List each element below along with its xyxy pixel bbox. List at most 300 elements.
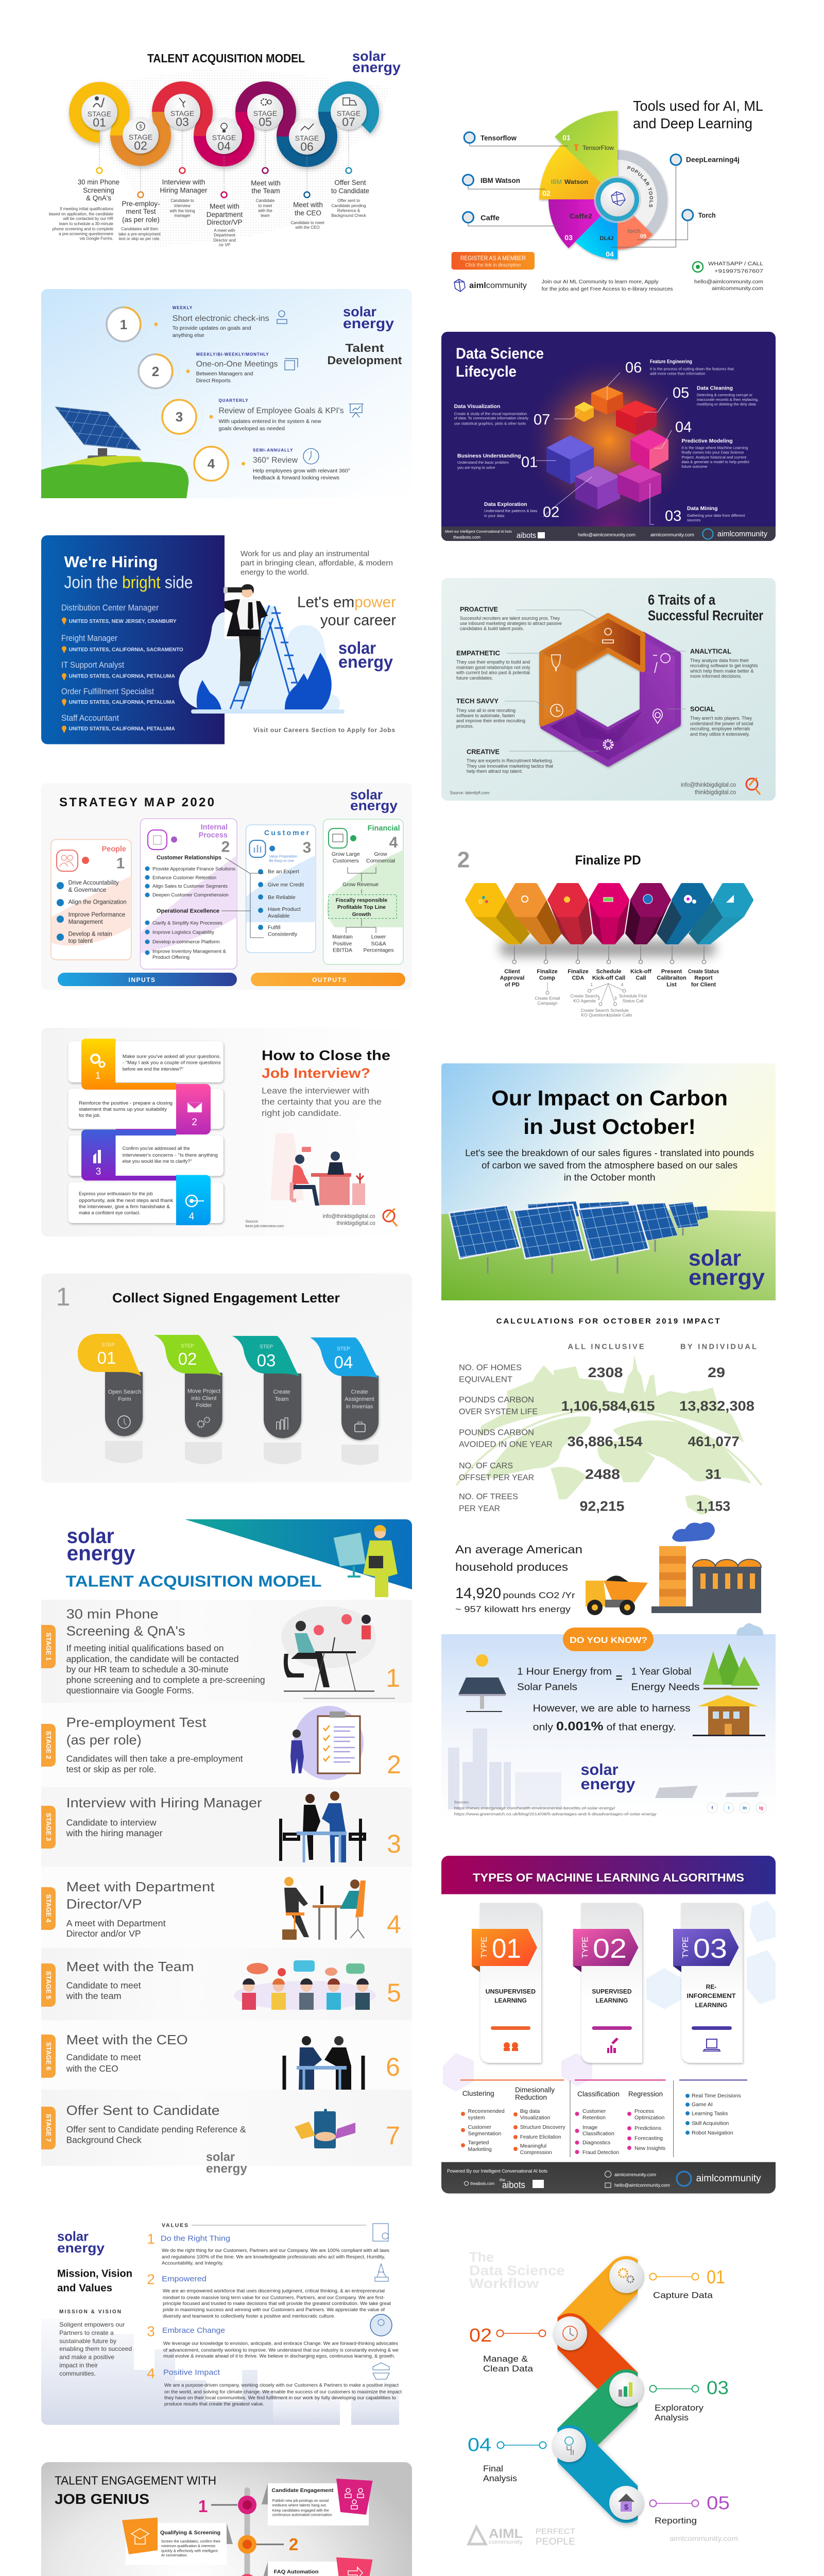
row 5 text: Meet with the Team bbox=[66, 1959, 194, 1974]
value 3: We leverage our knowledge to envision, anticipate, and embrace Change. We are forward-thinking advocates bbox=[163, 2341, 398, 2347]
card: internal process: Clarify & Simplify Key Processes bbox=[152, 921, 222, 926]
step 4 text: SEMI-ANNUALLY bbox=[253, 448, 293, 452]
trait: empathetic: They use their empathy to build and bbox=[456, 659, 530, 665]
faint globe with skyline bbox=[456, 1355, 762, 1515]
intro text: energy to the world. bbox=[241, 568, 309, 577]
sources: Sources: bbox=[454, 1800, 469, 1805]
stage tab 7 bbox=[41, 2107, 56, 2149]
step 3 text: With updates entered in the system & new bbox=[218, 418, 321, 425]
row 1 text: by our HR team to schedule a 30-minute bbox=[66, 1664, 229, 1674]
value 4: on the world, and solving for climate change. We enable the success of our customers to maximize the impact bbox=[164, 2389, 402, 2395]
card: people: Management bbox=[68, 919, 104, 925]
stage 05 badge bbox=[247, 94, 283, 130]
card: customer: Be Easy to Use bbox=[269, 859, 294, 863]
column headings: BY INDIVIDUAL bbox=[680, 1343, 757, 1351]
stage tab 6 bbox=[41, 2035, 56, 2078]
type 02 card: 02 bbox=[593, 1934, 627, 1964]
step 04 text: Predictive Modeling bbox=[682, 438, 733, 444]
step 05 text: Data Cleaning bbox=[697, 385, 733, 392]
column: dimensionality reduction: Feature Elicitation bbox=[520, 2134, 561, 2140]
trait: social: They aren't solo players. They bbox=[690, 716, 752, 721]
step 04: Assignment bbox=[345, 1396, 374, 1402]
row 4 text: Meet with Department bbox=[66, 1879, 215, 1894]
prism labels: Call bbox=[636, 975, 646, 981]
hex prisms bbox=[465, 900, 753, 944]
panel: 6 traits of a successful recruiter bbox=[441, 578, 776, 801]
card: candidate engagement: Keep candidates engaged with the bbox=[272, 2508, 329, 2513]
step 2 ring: 2 bbox=[152, 364, 159, 379]
job: order fulfillment specialist bbox=[61, 687, 175, 706]
stage labels: Pre-employ- bbox=[122, 200, 160, 208]
step texts: statement that sums up your suitability bbox=[79, 1107, 167, 1112]
prism labels: Kick-off Call bbox=[592, 975, 625, 981]
footer strip: hello@aimlcommunity.com bbox=[578, 532, 636, 538]
type 03 card: INFORCEMENT bbox=[687, 1992, 736, 1999]
step number: 1 bbox=[56, 1282, 70, 1311]
card: customer: Give me Credit bbox=[268, 882, 304, 888]
stage 02 badge: $ bbox=[139, 124, 142, 130]
tools title bbox=[633, 98, 763, 131]
prism labels: Create Status bbox=[688, 969, 719, 975]
talent development heading: Talent bbox=[345, 342, 384, 354]
inputs bar bbox=[58, 973, 237, 986]
job genius heading: JOB GENIUS bbox=[55, 2491, 149, 2507]
stage labels: ment Test bbox=[126, 208, 156, 215]
trait: creative: They are experts in Recruitment Marketing. bbox=[467, 758, 553, 764]
card: customer: Fulfill bbox=[268, 925, 281, 931]
dump truck bbox=[586, 1575, 648, 1615]
column: classification: Customer bbox=[582, 2108, 606, 2114]
stage labels: Meet with bbox=[251, 179, 281, 187]
stage labels: Hiring Manager bbox=[160, 187, 208, 194]
logo: solar energy: solar bbox=[343, 304, 376, 319]
node 2 bbox=[238, 2535, 298, 2554]
value 3: of advancement, constantly working to improve. We understand that our industry is constantly evolving & we bbox=[163, 2347, 399, 2353]
column: regression bbox=[627, 2090, 665, 2151]
prism labels: Approval bbox=[500, 975, 524, 981]
hub bbox=[594, 176, 641, 223]
wheel labels: POPULAR TOOLS USED bbox=[627, 166, 653, 207]
column: classification: Classification bbox=[577, 2090, 620, 2098]
card: people: 1 bbox=[116, 855, 125, 872]
illustration: CEO handshake bbox=[284, 2036, 363, 2090]
job: IT support analyst: UNITED STATES, CALIFORNIA, PETALUMA bbox=[69, 674, 175, 680]
faint workflow title bbox=[469, 2249, 565, 2291]
job: distribution center manager bbox=[61, 603, 177, 625]
sub-task tree: 1 bbox=[590, 982, 593, 987]
talent development heading: Development bbox=[328, 354, 402, 367]
label 02: Clean Data bbox=[483, 2364, 534, 2374]
mission and vision text: Partners to create a bbox=[59, 2329, 114, 2336]
prism labels: List bbox=[666, 981, 677, 988]
column: dimensionality reduction: Compression bbox=[520, 2149, 552, 2156]
logo: solar energy bbox=[581, 1760, 636, 1793]
sub-task tree: Create Search bbox=[571, 993, 599, 998]
mission and vision text bbox=[59, 2309, 132, 2377]
stage details: Offer sent to bbox=[337, 198, 360, 203]
prism labels: Schedule bbox=[596, 969, 621, 975]
column: reinforcement uses: Game AI bbox=[692, 2102, 713, 2108]
stage 04 badge: STAGE bbox=[212, 133, 236, 142]
row labels: EQUIVALENT bbox=[459, 1375, 513, 1384]
careers note: Visit our Careers Section to Apply for Jobs bbox=[253, 726, 395, 734]
trait: analytical: ANALYTICAL bbox=[690, 647, 731, 655]
trait: proactive: use inbound marketing strategies to attract passive bbox=[460, 621, 562, 626]
values header: VALUES bbox=[162, 2223, 188, 2229]
column headings bbox=[568, 1343, 757, 1351]
logo: solar energy bbox=[689, 1246, 765, 1290]
card: internal process: Enhance Customer Retention bbox=[152, 875, 216, 881]
column: clustering: Recommended bbox=[468, 2108, 505, 2114]
trait: empathetic: future candidates. bbox=[456, 675, 493, 681]
capsule reflections bbox=[105, 1441, 379, 1465]
trait: analytical: recruiting software to get insights bbox=[690, 663, 758, 668]
card: qualifying and screening: minimum qualification & interests bbox=[161, 2544, 215, 2548]
trait: creative: help them attract top talent. bbox=[467, 769, 523, 774]
step 03 text bbox=[687, 505, 745, 522]
row 1 text: application, the candidate will be contacted bbox=[66, 1654, 239, 1664]
panel: calculations for october 2019 impact bbox=[441, 1317, 776, 1818]
contact: hello@aimlcommunity.com bbox=[694, 279, 763, 285]
ribbon step 3 bbox=[81, 1130, 176, 1181]
tool: Torch: Torch bbox=[698, 211, 716, 219]
logo: solar energy: energy bbox=[343, 315, 394, 331]
step 04 text: future outcome bbox=[682, 464, 708, 469]
node 1: 1 bbox=[198, 2497, 208, 2516]
column: reinforcement uses bbox=[685, 2093, 741, 2136]
value 4 bbox=[147, 2363, 402, 2407]
trait: proactive: candidates & build talent pools. bbox=[460, 626, 524, 631]
number 1: 1 bbox=[386, 1664, 400, 1692]
illustration: engineer with panel bbox=[334, 1525, 398, 1597]
energy equation: Energy Needs bbox=[631, 1682, 699, 1693]
row 5 text: with the team bbox=[66, 1991, 122, 2001]
label 01: 01 bbox=[707, 2266, 725, 2287]
row 1 text: phone screening and to complete a pre-screening bbox=[66, 1675, 265, 1685]
column: reinforcement uses: Robot Navigation bbox=[692, 2130, 733, 2136]
row 6 text: Meet with the CEO bbox=[66, 2032, 188, 2047]
mission and vision text: sustainable future by bbox=[59, 2337, 116, 2345]
sources: https://www.greenmatch.co.uk/blog/2014/08/5-advantages-and-5-disadvantages-of-solar-energy bbox=[454, 1812, 657, 1817]
row 6 text: with the CEO bbox=[66, 2063, 118, 2074]
impact values: 1,106,584,615 bbox=[561, 1398, 655, 1414]
ribbon step 3: 3 bbox=[96, 1166, 101, 1177]
card: internal process: Improve Logistics Capability bbox=[152, 929, 214, 936]
sources: https://news.energysage.com/health-environmental-benefits-of-solar-energy/ bbox=[454, 1806, 616, 1810]
contact: +919975767607 bbox=[714, 268, 763, 274]
step texts: before we end the interview?" bbox=[123, 1066, 183, 1072]
panel: talent development bbox=[41, 289, 412, 498]
logo: solar energy bbox=[57, 2229, 105, 2256]
do you know pill: DO YOU KNOW? bbox=[570, 1635, 647, 1645]
type 03 card: LEARNING bbox=[695, 2002, 727, 2009]
row 6 text: Candidate to meet bbox=[66, 2052, 141, 2062]
impact values bbox=[561, 1365, 754, 1514]
step 01 text: Understand the basic problem bbox=[457, 460, 509, 465]
step 03: 03 bbox=[257, 1351, 276, 1370]
cube 01 bbox=[546, 435, 594, 484]
step 1 ring bbox=[100, 301, 158, 348]
logo: solar energy: energy bbox=[689, 1265, 765, 1290]
ribbon step 1: 1 bbox=[95, 1071, 100, 1081]
map dots background bbox=[88, 67, 391, 247]
step texts: Reinforce the positive - prepare a closing bbox=[79, 1100, 173, 1106]
column: dimensionality reduction: Visualization bbox=[520, 2115, 551, 2121]
column: dimensionality reduction bbox=[513, 2086, 565, 2156]
faint hexagon background bbox=[443, 2053, 592, 2092]
job: order fulfillment specialist: UNITED STATES, CALIFORNIA, PETALUMA bbox=[69, 700, 175, 705]
stage 07 badge bbox=[331, 94, 367, 130]
source and contact: info@thinkbigdigital.co bbox=[681, 782, 736, 788]
step 05 text: Detecting & correcting corrupt or bbox=[697, 393, 752, 397]
ribbon step 4: 4 bbox=[189, 1211, 195, 1222]
step 1 text: To provide updates on goals and bbox=[173, 325, 251, 331]
row 7 text bbox=[66, 2103, 246, 2145]
mission and vision text: enabling them to succeed bbox=[59, 2345, 132, 2352]
trait: social: understand the power of social bbox=[690, 721, 753, 726]
close-the-interview heading: How to Close the bbox=[262, 1047, 390, 1063]
logo: solar energy: energy bbox=[57, 2240, 105, 2256]
step 4 text: 360° Review bbox=[253, 456, 298, 465]
row backgrounds bbox=[41, 1600, 412, 2166]
card: internal process: Product Offering bbox=[152, 955, 190, 960]
panel: strategy map 2020 bbox=[41, 783, 412, 990]
ribbon step 1 bbox=[81, 1039, 176, 1090]
number 7: 7 bbox=[386, 2122, 400, 2150]
stage details: take a pre-employment bbox=[118, 232, 161, 236]
stage tab 1 bbox=[41, 1625, 56, 1668]
ml header: TYPES OF MACHINE LEARNING ALGORITHMS bbox=[473, 1871, 744, 1884]
column: reinforcement uses: Real Time Decisions bbox=[692, 2093, 741, 2099]
hex icons bbox=[479, 894, 734, 904]
label 02: Manage & bbox=[483, 2354, 528, 2364]
impact values: 92,215 bbox=[580, 1498, 624, 1514]
step 02: into Client bbox=[192, 1395, 216, 1401]
stage details: via Google Forms. bbox=[80, 236, 113, 241]
card: customer: Value Proposition: bbox=[269, 855, 298, 858]
trait: tech savvy: software to automate, fasten bbox=[456, 713, 515, 718]
node 03 bbox=[609, 2372, 643, 2406]
ml header bbox=[441, 1856, 776, 1894]
model heading: TALENT ACQUISITION MODEL bbox=[66, 1572, 321, 1590]
logo: solar energy bbox=[352, 48, 401, 75]
row 3 text bbox=[66, 1795, 262, 1838]
node 2: 2 bbox=[289, 2535, 298, 2554]
wheel sectors bbox=[539, 111, 653, 259]
tool connectors bbox=[468, 143, 688, 247]
card: financial: EBITDA bbox=[333, 947, 352, 953]
step 02: 02 bbox=[178, 1349, 197, 1368]
social icons: in bbox=[743, 1805, 747, 1810]
stage details: Candidate bbox=[256, 198, 275, 203]
step 01: 01 bbox=[97, 1348, 116, 1367]
trees icon bbox=[703, 1643, 760, 1689]
card: customer: Available bbox=[268, 913, 290, 919]
prism labels: CDA bbox=[572, 975, 584, 981]
logo: solar energy gray bbox=[206, 2150, 248, 2176]
column: clustering bbox=[461, 2089, 505, 2153]
footer strip: aimlcommunity bbox=[717, 530, 767, 538]
card: qualifying and screening: quickly & effectively with intelligent bbox=[161, 2548, 218, 2553]
step 1 text: WEEKLY bbox=[173, 306, 193, 310]
card: people: Develop & retain bbox=[68, 931, 112, 937]
step numbers: 05 bbox=[673, 385, 689, 401]
job genius heading: TALENT ENGAGEMENT WITH bbox=[55, 2474, 216, 2487]
join text: for the jobs and get Free Access to e-library resources bbox=[542, 286, 673, 292]
column: regression: Optimization bbox=[634, 2115, 665, 2121]
tool: DeepLearning4j bbox=[671, 155, 740, 165]
value 1: 1 bbox=[147, 2231, 155, 2247]
row 2 text: Candidates will then take a pre-employment bbox=[66, 1754, 243, 1764]
type 01 card: UNSUPERVISED bbox=[486, 1988, 536, 1995]
mission and vision text: communities. bbox=[59, 2370, 96, 2377]
household text: pounds CO2 /Yr bbox=[503, 1590, 575, 1600]
card: financial: Maintain bbox=[332, 934, 353, 940]
card: financial: Lower bbox=[371, 934, 386, 940]
lifecycle title bbox=[456, 345, 544, 380]
stage 03 badge bbox=[164, 94, 200, 130]
tool: IBM Watson: IBM Watson bbox=[480, 176, 520, 184]
stage tab 2 bbox=[41, 1724, 56, 1767]
job: distribution center manager: Distribution Center Manager bbox=[61, 603, 159, 613]
tool: IBM Watson bbox=[462, 175, 520, 185]
social icons: t bbox=[728, 1805, 729, 1810]
column: classification: Fraud Detection bbox=[582, 2149, 619, 2156]
footer strip: Meet our Intelligent Conversational AI bots bbox=[445, 529, 512, 534]
hiring heading bbox=[64, 553, 193, 592]
card: customer: Be Reliable bbox=[268, 894, 296, 901]
illustration: team bbox=[234, 1960, 376, 2010]
source note: Source: bbox=[245, 1219, 259, 1224]
card: candidate engagement: Candidate Engagement bbox=[272, 2487, 334, 2494]
column: dimensionality reduction: Reduction bbox=[515, 2093, 547, 2102]
contact bbox=[693, 261, 763, 292]
sub-task tree: Schedule bbox=[610, 1008, 629, 1013]
card: internal process: Deepen Customer Comprehension bbox=[152, 892, 229, 898]
card: internal process: Internal bbox=[201, 823, 228, 832]
row 2 text bbox=[66, 1715, 243, 1774]
social icons: f bbox=[712, 1805, 714, 1810]
stage details: based on application, the candidate bbox=[49, 212, 114, 216]
row 3 text: Interview with Hiring Manager bbox=[66, 1795, 262, 1810]
stage details: A meet with bbox=[214, 228, 235, 233]
sub-task tree: Schedule First bbox=[619, 993, 647, 998]
card: financial: Commercial bbox=[366, 858, 395, 864]
job: freight manager: UNITED STATES, CALIFORNIA, SACRAMENTO bbox=[69, 647, 183, 653]
stage 02 badge bbox=[123, 117, 159, 154]
row 5 text: Candidate to meet bbox=[66, 1980, 141, 1991]
energy equation: 1 Year Global bbox=[631, 1667, 691, 1677]
impact values: 2488 bbox=[585, 1466, 620, 1482]
step 01 text: Business Understanding bbox=[457, 453, 521, 459]
number 6: 6 bbox=[386, 2053, 400, 2081]
trait: social: and they utilize it extensively. bbox=[690, 732, 750, 737]
card: people: top talent bbox=[68, 938, 93, 944]
logo: solar energy bbox=[338, 638, 393, 671]
cube 06 bbox=[591, 386, 623, 415]
node 05: $ bbox=[624, 2503, 629, 2512]
stage details: If meeting initial qualifications bbox=[60, 207, 113, 211]
step 03: STEP bbox=[260, 1344, 273, 1350]
ml footer: Powered By our Intelligent Conversational AI bots bbox=[447, 2168, 547, 2174]
traits title bbox=[648, 591, 763, 623]
house icon bbox=[693, 1695, 765, 1736]
job: staff accountant: Staff Accountant bbox=[61, 713, 119, 723]
blue job list bbox=[41, 535, 225, 744]
step 2 text: Between Managers and bbox=[196, 370, 253, 377]
impact values: 29 bbox=[708, 1365, 725, 1380]
workflow footer logos: aimlcommunity.com bbox=[670, 2535, 738, 2543]
panel: talent acquisition serpentine bbox=[49, 48, 401, 247]
label 03: Exploratory bbox=[655, 2403, 704, 2413]
household text: ~ 957 kilowatt hrs energy bbox=[455, 1605, 571, 1614]
type 01 card: LEARNING bbox=[494, 1997, 527, 2004]
workflow footer logos: PERFECT bbox=[536, 2527, 575, 2536]
lifecycle connectors bbox=[536, 372, 672, 524]
stage labels: & QnA's bbox=[86, 194, 111, 202]
label 04: Analysis bbox=[483, 2473, 517, 2483]
row 4 text: Director/VP bbox=[66, 1896, 142, 1912]
step 3 ring: 3 bbox=[176, 409, 183, 425]
carbon subtext: Let's see the breakdown of our sales figures - translated into pounds bbox=[465, 1147, 754, 1158]
do you know pill bbox=[563, 1628, 654, 1651]
value 2: diversity and teamwork to collectively foster a positive and meritocratic culture. bbox=[163, 2314, 335, 2319]
sub-task tree: 4 bbox=[621, 982, 624, 987]
faint workflow title: Workflow bbox=[469, 2276, 539, 2291]
logo: solar energy: solar bbox=[350, 787, 383, 803]
step 01: Open Search bbox=[108, 1389, 141, 1395]
tools wheel bbox=[539, 110, 669, 262]
stage details: Department bbox=[214, 233, 236, 238]
talent development heading bbox=[328, 342, 402, 367]
workflow footer logos: AIML bbox=[489, 2527, 523, 2541]
card: internal process bbox=[140, 819, 237, 969]
row 4 text: Director and/or VP bbox=[66, 1928, 141, 1939]
sub-task tree: Create Email bbox=[535, 996, 560, 1001]
step 3 text: QUARTERLY bbox=[218, 398, 249, 403]
calculations heading: CALCULATIONS FOR OCTOBER 2019 IMPACT bbox=[496, 1317, 720, 1326]
column: dimensionality reduction: Dimesionally bbox=[515, 2086, 555, 2094]
step 02: STEP bbox=[181, 1343, 194, 1349]
trait: analytical: more informed decisions. bbox=[690, 674, 742, 679]
tools wheel: 03 bbox=[564, 233, 573, 242]
value 2: 2 bbox=[147, 2272, 155, 2287]
card: financial bbox=[323, 819, 403, 964]
gray backing rings bbox=[617, 150, 667, 234]
trait: tech savvy: and improve their entire recruiting bbox=[456, 718, 525, 723]
label 04: 04 bbox=[468, 2434, 491, 2455]
stage tab 5: STAGE 5 bbox=[45, 1971, 53, 1999]
job genius heading bbox=[55, 2474, 216, 2507]
stage 06 badge bbox=[289, 118, 325, 155]
column: clustering: Segmentation bbox=[468, 2131, 501, 2137]
white step cards bbox=[68, 1041, 224, 1223]
ml footer: the bbox=[500, 2178, 506, 2182]
stage details: Background Check bbox=[331, 213, 367, 218]
type 01 card: 01 bbox=[492, 1934, 521, 1964]
tool: Tensorflow bbox=[464, 132, 517, 143]
trait: analytical: which help them make better & bbox=[690, 669, 754, 674]
logo: solar energy gray: solar bbox=[206, 2150, 235, 2164]
step texts: else you would like me to clarify?" bbox=[123, 1159, 192, 1164]
workflow footer logos: PEOPLE bbox=[536, 2536, 575, 2547]
type 03 card: TYPE bbox=[681, 1937, 690, 1958]
card: people bbox=[51, 840, 131, 960]
value 4: We are a purpose-driven company, working closely with our Customers & Partners to make a positive impact bbox=[164, 2383, 399, 2388]
step 02 text: Data Exploration bbox=[484, 501, 527, 507]
solar panel illustration bbox=[55, 407, 141, 461]
finalize heading: Finalize PD bbox=[575, 853, 641, 868]
